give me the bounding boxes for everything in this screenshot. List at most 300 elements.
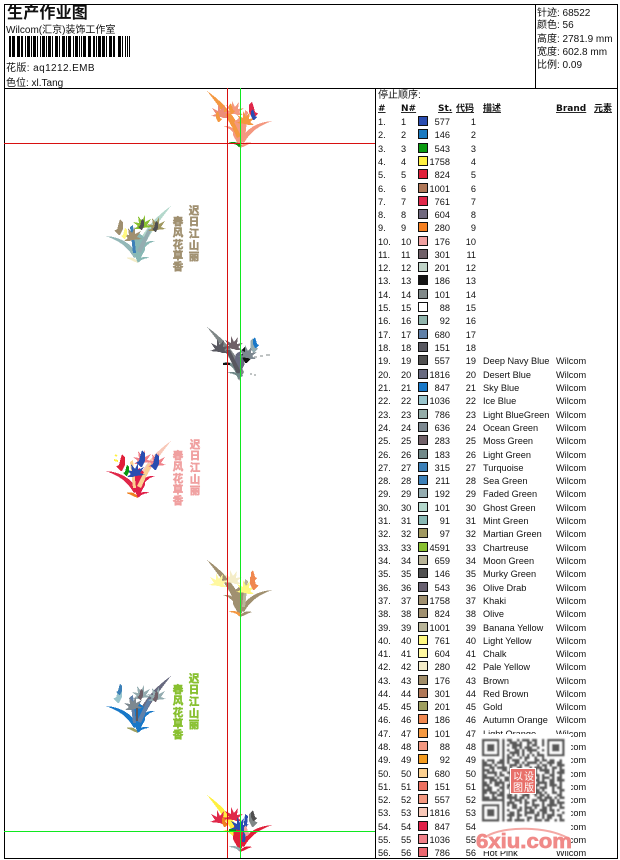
row 22: Ice Blue [483, 396, 516, 406]
row 39 [378, 622, 586, 633]
row 33: Wilcom [556, 543, 586, 553]
row 48: 48 [466, 742, 476, 752]
row 39: Banana Yellow [483, 623, 544, 633]
row 4: 4 [471, 157, 476, 167]
row 48: 48 [401, 742, 411, 752]
row 36: 36 [466, 583, 476, 593]
row 8: 8 [401, 210, 406, 220]
row 35: Murky Green [483, 569, 536, 579]
row 1: 1 [471, 117, 476, 127]
row 23: Light BlueGreen [483, 410, 549, 420]
alignment guide lines [4, 88, 375, 858]
row 15: 15. [378, 303, 391, 313]
row 55: Wilcom [556, 835, 586, 845]
row 17: 680 [435, 330, 450, 340]
row 14: 14 [401, 290, 411, 300]
poem caption 6: 草 [173, 717, 183, 730]
row 37: Wilcom [556, 596, 586, 606]
poem caption 4: 山 [190, 473, 200, 486]
poem caption 2: 花 [173, 238, 184, 251]
row 20: 20 [466, 370, 476, 380]
row 12: 12 [401, 263, 411, 273]
poem caption 2: 江 [189, 227, 200, 240]
row 10: 176 [435, 237, 450, 247]
plant 4 [106, 441, 171, 498]
row 25: Wilcom [556, 436, 586, 446]
row 22 [378, 396, 586, 406]
poem caption 4 [173, 438, 201, 507]
row 38: Wilcom [556, 609, 586, 619]
row 42: 42 [401, 662, 411, 672]
row 34: 34. [378, 556, 391, 566]
poem caption 6: 山 [189, 707, 199, 720]
row 40: 761 [435, 636, 450, 646]
row 11: 11 [401, 250, 411, 260]
poem caption 4: 丽 [190, 485, 201, 497]
row 39: 39 [401, 623, 411, 633]
row 22: 22 [401, 396, 411, 406]
row 14 [378, 290, 476, 300]
row 54: 54 [466, 822, 476, 832]
row 47: Light Orange [483, 729, 536, 739]
row 10: 10 [401, 237, 411, 247]
row 26: Wilcom [556, 450, 586, 460]
row 13: 186 [435, 276, 450, 286]
row 14: 14 [466, 290, 476, 300]
row 5: 5 [401, 170, 406, 180]
table header: 元素 [594, 102, 612, 114]
row 19: 19. [378, 356, 391, 366]
row 44: Red Brown [483, 689, 528, 699]
row 5: 5 [471, 170, 476, 180]
poem caption 6: 丽 [189, 719, 200, 731]
watermark 6xiu.com: 6xiu.com [476, 831, 572, 853]
stop sequence label: 停止顺序: [378, 88, 421, 101]
row 29 [378, 488, 586, 499]
row 30: 101 [435, 503, 450, 513]
row 31: 31 [466, 516, 476, 526]
row 18: 151 [435, 343, 450, 353]
row 46: 46 [466, 715, 476, 725]
poem caption 4: 花 [173, 472, 184, 485]
row 51: Wilcom [556, 782, 586, 792]
row 41: 604 [435, 649, 450, 659]
row 20: Wilcom [556, 370, 586, 380]
row 25: 25. [378, 436, 391, 446]
row 56: Wilcom [556, 848, 586, 858]
row 46: Autumn Orange [483, 715, 548, 725]
row 52: 52 [466, 795, 476, 805]
row 43: 43 [401, 676, 411, 686]
poem caption 2 [173, 204, 200, 273]
row 10: 10. [378, 237, 391, 247]
row 22: 1036 [430, 396, 450, 406]
row 44: Wilcom [556, 689, 586, 699]
row 52: 52. [378, 795, 391, 805]
row 51: 51 [466, 782, 476, 792]
row 55: 1036 [430, 835, 450, 845]
row 20: 20 [401, 370, 411, 380]
row 23 [378, 410, 586, 420]
row 35: 35. [378, 569, 391, 579]
row 51: 51 [401, 782, 411, 792]
row 33: 33. [378, 543, 391, 553]
poem caption 4: 春 [173, 449, 184, 462]
row 5: 824 [435, 170, 450, 180]
row 44 [378, 688, 586, 699]
row 32: 32 [401, 529, 411, 539]
row 9: 9. [378, 223, 386, 233]
row 35: 35 [401, 569, 411, 579]
row 43: 43 [466, 676, 476, 686]
poem caption 6: 迟 [189, 672, 200, 685]
row 41: Chalk [483, 649, 507, 659]
row 15 [378, 302, 476, 313]
row 38: 824 [435, 609, 450, 619]
row 52: 557 [435, 795, 450, 805]
row 27: 27 [466, 463, 476, 473]
row 3: 3 [471, 144, 476, 154]
row 42: Wilcom [556, 662, 586, 672]
row 34: Wilcom [556, 556, 586, 566]
row 37: Khaki [483, 596, 506, 606]
row 42: 42 [466, 662, 476, 672]
row 13 [378, 276, 476, 286]
row 24: Wilcom [556, 423, 586, 433]
poem caption 6: 香 [173, 728, 184, 741]
row 41 [378, 648, 586, 659]
row 35: 35 [466, 569, 476, 579]
row 8: 8 [471, 210, 476, 220]
QR logo stamp: 设 [524, 771, 534, 783]
poem caption 2: 草 [173, 249, 183, 262]
row 39: 39. [378, 623, 391, 633]
QR logo stamp: 以 [513, 772, 523, 783]
row 26: Light Green [483, 450, 531, 460]
row 3: 543 [435, 144, 450, 154]
poem caption 4: 迟 [190, 438, 201, 451]
row 50: 50. [378, 769, 391, 779]
row 46 [378, 714, 586, 725]
row 9: 9 [471, 223, 476, 233]
row 25 [378, 436, 586, 446]
row 32: Martian Green [483, 529, 542, 539]
row 47: 47 [401, 729, 411, 739]
row 22: Wilcom [556, 396, 586, 406]
plant 1 [207, 91, 272, 148]
row 7: 761 [435, 197, 450, 207]
plant 5 [207, 560, 272, 617]
row 56: 56 [466, 848, 476, 858]
row 44: 44 [466, 689, 476, 699]
plant 6 [106, 676, 171, 733]
row 47: 101 [435, 729, 450, 739]
row 5 [378, 170, 476, 180]
row 41: 41 [466, 649, 476, 659]
poem caption 6 [173, 672, 200, 741]
table header: Brand [556, 104, 586, 114]
row 28: 28. [378, 476, 391, 486]
row 45: 201 [435, 702, 450, 712]
plant 3 [207, 327, 270, 381]
row 14: 14. [378, 290, 391, 300]
row 50: Wilcom [556, 769, 586, 779]
row 17 [378, 330, 476, 340]
row 36: Olive Drab [483, 583, 526, 593]
row 26 [378, 450, 586, 460]
row 34: 34 [401, 556, 411, 566]
row 21: 21. [378, 383, 391, 393]
row 23: 786 [435, 410, 450, 420]
poem caption 6: 春 [173, 683, 184, 696]
row 18: 18. [378, 343, 391, 353]
row 21: 21 [466, 383, 476, 393]
row 53 [378, 808, 586, 818]
stats panel: 宽度: 602.8 mm [537, 45, 607, 58]
row 19: 19 [401, 356, 411, 366]
row 42 [378, 662, 586, 672]
row 11: 11 [466, 250, 476, 260]
row 43: 176 [435, 676, 450, 686]
row 21: 21 [401, 383, 411, 393]
row 44: 44 [401, 689, 411, 699]
table header: 描述 [483, 102, 501, 114]
row 53: 53. [378, 808, 391, 818]
row 48 [378, 742, 586, 752]
colourway: 色位: xl.Tang [6, 76, 63, 89]
row 49 [378, 754, 586, 765]
row 2: 146 [435, 130, 450, 140]
row 22: 22 [466, 396, 476, 406]
stats panel [537, 6, 613, 71]
row 40 [378, 636, 586, 646]
stats panel: 高度: 2781.9 mm [537, 32, 613, 45]
row 29: 29 [401, 489, 411, 499]
row 32: 97 [440, 529, 450, 539]
row 19 [378, 356, 586, 366]
row 43: Brown [483, 676, 509, 686]
row 6 [378, 184, 476, 194]
row 1: 1 [401, 117, 406, 127]
row 51: 151 [435, 782, 450, 792]
row 28: Wilcom [556, 476, 586, 486]
row 17: 17 [466, 330, 476, 340]
row 30: Ghost Green [483, 503, 536, 513]
row 49: 92 [440, 755, 450, 765]
row 18: 18 [401, 343, 411, 353]
row 45: Wilcom [556, 702, 586, 712]
row 56: 786 [435, 848, 450, 858]
row 35 [378, 568, 586, 579]
row 37: 37 [401, 596, 411, 606]
row 26: 26. [378, 450, 391, 460]
plant 7 [207, 795, 272, 852]
row 19: Wilcom [556, 356, 586, 366]
row 6: 6 [401, 184, 406, 194]
row 36: Wilcom [556, 583, 586, 593]
poem caption 2: 风 [173, 227, 184, 239]
row 2: 2 [471, 130, 476, 140]
row 25: 25 [401, 436, 411, 446]
row 40: 40 [401, 636, 411, 646]
row 33: 33 [401, 543, 411, 553]
row 8: 604 [435, 210, 450, 220]
row 25: 25 [466, 436, 476, 446]
row 28 [378, 476, 586, 486]
row 16: 16 [401, 316, 411, 326]
row 33: 33 [466, 543, 476, 553]
barcode [9, 36, 130, 57]
row 53: Wilcom [556, 808, 586, 818]
row 38 [378, 608, 586, 619]
row 26: 26 [401, 450, 411, 460]
row 11: 301 [435, 250, 450, 260]
row 41: 41 [401, 649, 411, 659]
plant 2 [106, 206, 171, 263]
row 42: 280 [435, 662, 450, 672]
row 45: 45 [401, 702, 411, 712]
row 31 [378, 516, 586, 526]
row 7 [378, 196, 476, 207]
title: 生产作业图 [7, 4, 88, 22]
row 50 [378, 768, 586, 779]
row 43 [378, 676, 586, 686]
row 33: Chartreuse [483, 543, 528, 553]
row 13: 13 [466, 276, 476, 286]
row 6: 6. [378, 184, 386, 194]
row 54: Wilcom [556, 822, 586, 832]
company name: Wilcom(汇京)装饰工作室 [6, 23, 115, 36]
row 24: 24 [401, 423, 411, 433]
row 54: 54. [378, 822, 391, 832]
QR logo stamp: 图 [513, 782, 523, 794]
poem caption 4: 草 [173, 483, 183, 496]
row 38: 38 [466, 609, 476, 619]
row 5: 5. [378, 170, 386, 180]
row 55: 55 [401, 835, 411, 845]
row 34: 34 [466, 556, 476, 566]
poem caption 2: 日 [189, 216, 199, 228]
row 30: 30 [401, 503, 411, 513]
row 42: 42. [378, 662, 391, 672]
row 20 [378, 370, 586, 380]
row 2: 2. [378, 130, 386, 140]
row 3: 3. [378, 144, 386, 154]
row 24 [378, 422, 586, 433]
row 47: 47. [378, 729, 391, 739]
row 29: Wilcom [556, 489, 586, 499]
row 24: 24 [466, 423, 476, 433]
header: document info [6, 4, 130, 89]
row 22: 22. [378, 396, 391, 406]
row 24: Ocean Green [483, 423, 538, 433]
row 36 [378, 582, 586, 593]
table header [378, 102, 612, 114]
poem caption 2: 香 [173, 260, 184, 273]
row 53: 1816 [430, 808, 450, 818]
row 42: Pale Yellow [483, 662, 530, 672]
row 46: 46. [378, 715, 391, 725]
row 3: 3 [401, 144, 406, 154]
row 20: Desert Blue [483, 370, 531, 380]
row 54: 847 [435, 822, 450, 832]
row 56: 56. [378, 848, 391, 858]
row 23: 23 [401, 410, 411, 420]
row 27: 315 [435, 463, 450, 473]
row 31: 31. [378, 516, 391, 526]
row 55 [378, 834, 586, 845]
row 49: Wilcom [556, 755, 586, 765]
row 7: 7 [401, 197, 406, 207]
row 38: 38 [401, 609, 411, 619]
row 32 [378, 528, 586, 539]
row 31: Wilcom [556, 516, 586, 526]
row 25: 283 [435, 436, 450, 446]
row 44: 44. [378, 689, 391, 699]
row 47: 47 [466, 729, 476, 739]
QR logo stamp [510, 768, 536, 794]
row 44: 301 [435, 689, 450, 699]
poem caption 6: 江 [189, 695, 200, 708]
row 54 [378, 822, 586, 832]
row 29: Faded Green [483, 489, 537, 499]
row 48: Wilcom [556, 742, 586, 752]
colour table [378, 116, 586, 858]
row 39: 1001 [430, 623, 450, 633]
row 4 [378, 156, 476, 167]
row 50: 50 [466, 769, 476, 779]
row 13: 13 [401, 276, 411, 286]
row 54: 54 [401, 822, 411, 832]
row 6: 1001 [430, 184, 450, 194]
row 49: 49 [466, 755, 476, 765]
row 28: 211 [435, 476, 450, 486]
stats panel: 颜色: 56 [537, 18, 574, 31]
table header: N# [401, 104, 416, 114]
row 4: 4 [401, 157, 406, 167]
row 56: Hot Pink [483, 848, 518, 858]
row 46: 186 [435, 715, 450, 725]
row 37: 37. [378, 596, 391, 606]
row 49: 49 [401, 755, 411, 765]
row 48: 48. [378, 742, 391, 752]
row 51: 51. [378, 782, 391, 792]
poem caption 2: 山 [189, 239, 199, 252]
row 31: Mint Green [483, 516, 528, 526]
table header: # [378, 104, 386, 114]
row 47: Wilcom [556, 729, 586, 739]
row 4: 1758 [430, 157, 450, 167]
row 21: Wilcom [556, 383, 586, 393]
row 3 [378, 144, 476, 154]
row 40: 40. [378, 636, 391, 646]
QR code [481, 734, 571, 851]
row 50: 680 [435, 769, 450, 779]
poem caption 6: 日 [189, 684, 199, 696]
row 33: 4591 [430, 543, 450, 553]
row 2: 2 [401, 130, 406, 140]
row 7: 7 [471, 197, 476, 207]
row 15: 88 [440, 303, 450, 313]
row 19: 19 [466, 356, 476, 366]
row 36: 36 [401, 583, 411, 593]
row 14: 101 [435, 290, 450, 300]
row 17: 17 [401, 330, 411, 340]
row 21 [378, 382, 586, 393]
poem caption 4: 香 [173, 494, 184, 507]
row 52: Wilcom [556, 795, 586, 805]
row 23: 23 [466, 410, 476, 420]
